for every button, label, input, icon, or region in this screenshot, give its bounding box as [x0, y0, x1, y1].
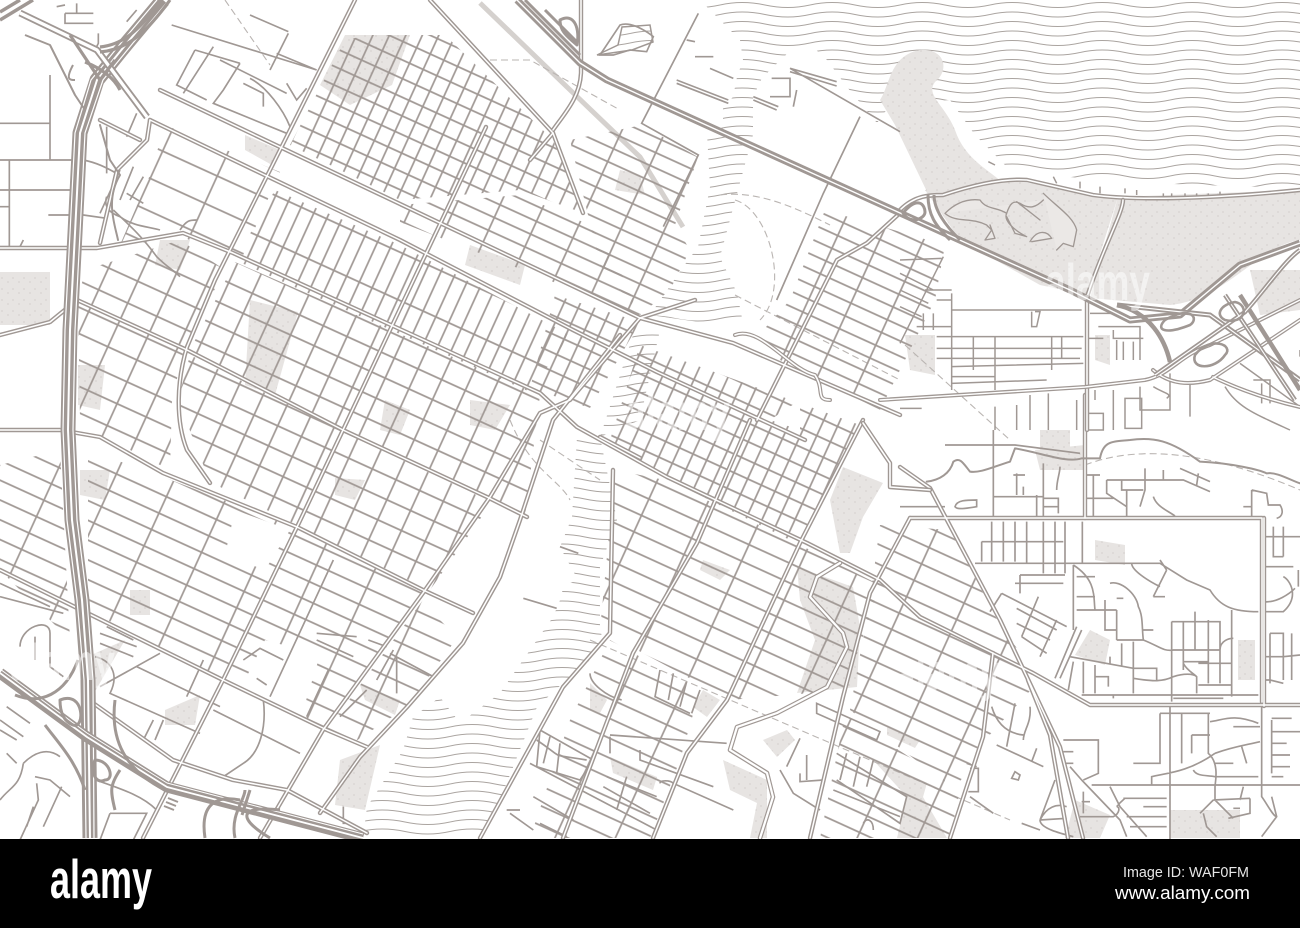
water: bay and northern river: [650, 0, 1300, 325]
water: downtown river: [600, 330, 660, 437]
creek: east river: [730, 563, 847, 838]
road: northern shore: [900, 180, 1300, 210]
freeway: north interchange loop: [525, 0, 580, 55]
watermark text: [10, 254, 1150, 702]
freeway: north-east interchange: [903, 195, 960, 240]
grid: east: [850, 525, 1040, 790]
grid: west: [78, 240, 225, 470]
watermark: centre: alamy: [625, 384, 730, 442]
water areas: [363, 0, 1300, 838]
grid: north-central rows: [400, 195, 640, 316]
freeway: northern: [517, 0, 1300, 320]
footer image id: Image ID: WAF0FM: [1123, 864, 1249, 881]
grid: south-east: [820, 715, 960, 838]
watermark: south-east: alamy: [895, 644, 1000, 702]
grid: north-east: [750, 210, 945, 410]
creek: eastern bend: [863, 423, 930, 490]
grid: downtown: [610, 345, 860, 545]
footer bar: [0, 839, 1300, 928]
south-west streets: [0, 560, 433, 840]
grid: south-west: [88, 450, 423, 730]
parks: scattered: [320, 35, 410, 105]
marsh islands: [945, 193, 1077, 250]
creek: marsh edge: [927, 439, 1300, 483]
grid: station blocks: [530, 295, 640, 408]
freeway: southern: [0, 669, 363, 838]
grid: river edge west: [327, 600, 470, 745]
grid: central-south: [178, 355, 487, 612]
northern shore road and east rows: [900, 162, 1300, 430]
footer url: www.alamy.com: [1114, 883, 1250, 903]
grid: central: [190, 262, 540, 517]
water: pond: [597, 25, 653, 55]
freeway: south-west interchange ramps: [15, 660, 280, 838]
north-west streets: [0, 3, 317, 277]
creek: western ravine: [100, 125, 120, 240]
street grids: [0, 35, 1040, 838]
freeway: eastern interchange: [1117, 250, 1300, 400]
watermark: east: alamy: [1045, 254, 1150, 312]
grid: old town: [570, 125, 698, 315]
footer logo: alamy: [50, 848, 152, 910]
grid: south: [530, 640, 700, 838]
park: bay marsh: [880, 50, 1005, 198]
rail and trails: [225, 0, 1300, 820]
freeway: north-west interchange: [0, 0, 170, 117]
grid: north district: [290, 35, 583, 213]
north shore road and creeks: [100, 125, 1300, 838]
watermark: far south-west: alamy: [10, 634, 115, 692]
water: southern river: [363, 437, 617, 838]
suburban east streets: [900, 430, 1300, 840]
north-east fringe streets: [600, 13, 900, 300]
road: east main: [880, 300, 1300, 407]
south-centre sparse streets: [507, 547, 907, 837]
grid: south of downtown: [600, 470, 880, 700]
grid: far west: [0, 450, 70, 640]
rail: dashed lines: [225, 0, 1300, 820]
grid: north-west: [120, 125, 280, 262]
rail yard band: [480, 3, 683, 227]
road: shore link south: [1087, 200, 1123, 430]
park: wetland: [925, 180, 1118, 295]
creek: downtown loop: [735, 334, 830, 400]
grid: central columns: [235, 190, 570, 392]
park: eastern flats: [1090, 190, 1300, 305]
clearings: [225, 400, 800, 720]
freeway: western corridor: [63, 0, 169, 838]
